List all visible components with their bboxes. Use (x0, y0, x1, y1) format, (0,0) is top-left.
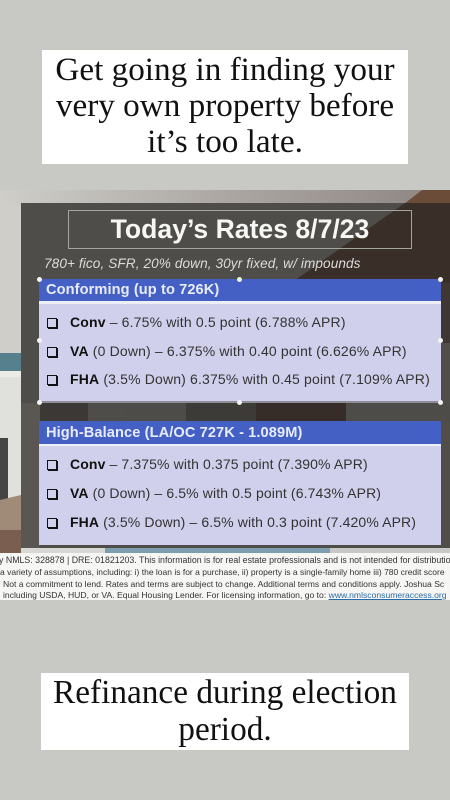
high-balance rate: conv: Conv – 7.375% with 0.375 point (7.390% APR) (70, 456, 368, 472)
closing caption: Refinance during election (53, 674, 397, 711)
conforming header (39, 279, 441, 304)
disclaimer strip (0, 553, 450, 600)
title box: Today’s Rates 8/7/23 (111, 214, 369, 244)
disclaimer strip: a variety of assumptions, including: i) the loan is for a purchase, ii) property is a single-family home iii) 780 credit score (0, 567, 445, 577)
disclaimer strip: Not a commitment to lend. Rates and terms are subject to change. Additional terms and conditions apply. Joshua Sc (3, 579, 444, 589)
dark translucent rates panel (21, 203, 450, 548)
closing caption (41, 673, 409, 750)
headline: top caption: very own property before (56, 87, 394, 124)
high-balance rate: fha: FHA (3.5% Down) – 6.5% with 0.3 point (7.420% APR) (70, 514, 416, 530)
high-balance header: High-Balance (LA/OC 727K - 1.089M) (46, 425, 302, 441)
photo background: room interior (0, 190, 450, 553)
selection handles (37, 277, 443, 405)
conforming rate: conv: Conv – 6.75% with 0.5 point (6.788% APR) (70, 314, 346, 330)
conforming rate: va: VA (0 Down) – 6.375% with 0.40 point (6.626% APR) (70, 343, 407, 359)
high-balance rate: va: VA (0 Down) – 6.5% with 0.5 point (6.743% APR) (70, 485, 381, 501)
assumptions subtitle: 780+ fico, SFR, 20% down, 30yr fixed, w/ impounds (44, 256, 361, 271)
panel: conforming rates (37, 277, 443, 405)
high-balance header (39, 421, 441, 446)
disclaimer strip: including USDA, HUD, or VA. Equal Housing Lender. For licensing information, go to: www.nmlsconsumeraccess.org (3, 590, 447, 600)
conforming rate: fha: FHA (3.5% Down) 6.375% with 0.45 point (7.109% APR) (70, 371, 430, 387)
panel: high-balance rates (39, 421, 441, 545)
conforming card body (39, 304, 441, 403)
disclaimer strip: y NMLS: 328878 | DRE: 01821203. This information is for real estate professionals and is not intended for distributio (0, 555, 450, 565)
closing caption: period. (178, 711, 272, 748)
conforming header: Conforming (up to 726K) (46, 282, 219, 298)
headline: top caption: Get going in finding your (55, 51, 395, 88)
headline: top caption (42, 50, 408, 164)
high-balance card body (39, 446, 441, 545)
headline: top caption: it’s too late. (147, 123, 303, 160)
title box (68, 210, 412, 249)
